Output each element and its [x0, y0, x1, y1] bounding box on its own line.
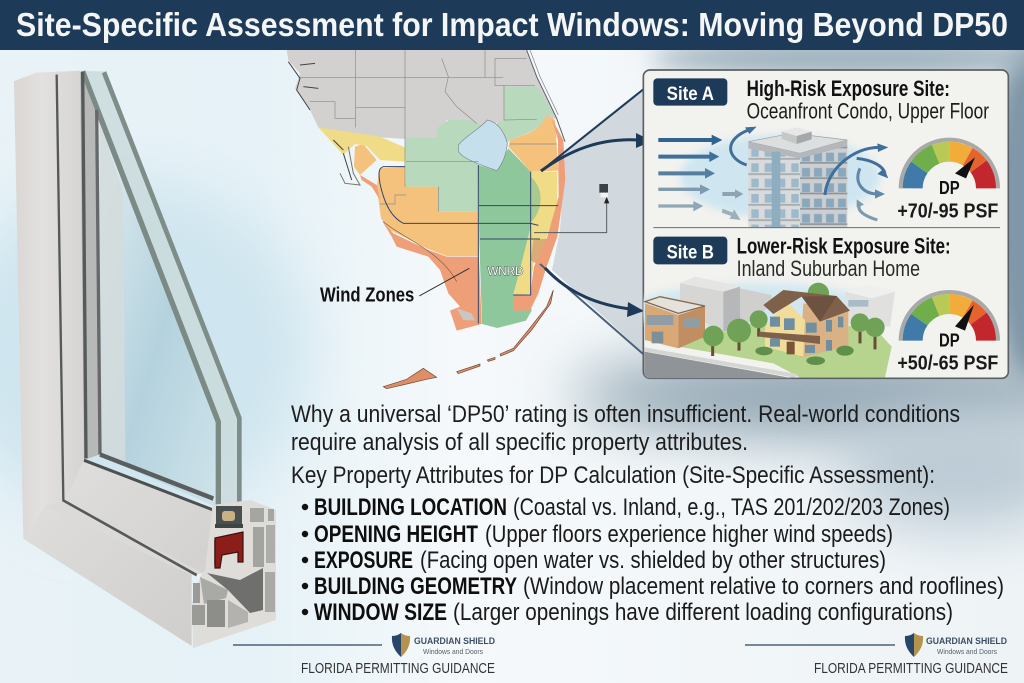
- footer logo left: Windows and Doors: [423, 647, 483, 656]
- site A scene: [658, 127, 888, 227]
- shield icon: [905, 633, 923, 657]
- footer logo right: [745, 633, 1008, 677]
- exposure: [302, 547, 886, 574]
- site B gauge: +50/-65 PSF: [897, 353, 998, 375]
- window frame cross-section: [14, 71, 276, 648]
- locator line and marker: [534, 184, 609, 233]
- house: [755, 290, 854, 365]
- site A gauge: +70/-95 PSF: [897, 200, 998, 222]
- yellow zones: [318, 127, 557, 295]
- exposure: (Facing open water vs. shielded by other structures): [420, 547, 886, 574]
- site B heading: [737, 233, 951, 281]
- gasket and pane base: [216, 506, 242, 526]
- footer logo left: GUARDIAN SHIELD: [414, 636, 495, 647]
- building geometry: BUILDING GEOMETRY: [314, 573, 517, 600]
- WNRD label: WNRD: [487, 264, 524, 278]
- site A heading: [747, 76, 989, 123]
- building location: BUILDING LOCATION: [314, 494, 507, 521]
- site A badge: Site A: [667, 84, 714, 105]
- building: [748, 127, 847, 227]
- site A heading: High-Risk Exposure Site:: [747, 76, 950, 101]
- dark green zone: [478, 148, 532, 328]
- grass and road: [660, 323, 892, 377]
- title bar: [0, 0, 1024, 50]
- footer logo left: [233, 633, 495, 677]
- site A gauge: DP: [939, 177, 960, 198]
- Florida wind zone map: [287, 50, 609, 389]
- profile end section: [192, 500, 276, 648]
- site comparison panel: [630, 70, 1008, 378]
- brick building: [645, 297, 705, 348]
- orange zones: [354, 115, 558, 256]
- opening height: OPENING HEIGHT: [314, 521, 478, 548]
- divider: [653, 226, 1000, 229]
- intro text: [291, 401, 960, 456]
- vertical frame: [14, 71, 84, 539]
- wind zones label: Wind Zones: [320, 284, 414, 307]
- window size: WINDOW SIZE: [314, 599, 447, 626]
- site B badge: [653, 237, 727, 264]
- opening height: [302, 521, 893, 548]
- site A badge: [653, 78, 727, 106]
- opening height: (Upper floors experience higher wind speeds): [485, 521, 893, 548]
- building location: [302, 494, 950, 521]
- trees: [703, 310, 885, 356]
- window size: [302, 599, 953, 626]
- thermal reinforcement: [215, 532, 243, 568]
- wind zones label: [320, 268, 469, 307]
- site B badge: Site B: [667, 242, 714, 263]
- county and zone lines: [300, 50, 557, 212]
- attribute list: [302, 494, 1004, 626]
- site A gauge: [897, 140, 998, 222]
- horizontal frame: [23, 460, 213, 646]
- building geometry: [302, 573, 1004, 600]
- shield icon: [392, 633, 410, 657]
- glass panes: [80, 71, 239, 516]
- gray counties: [287, 50, 557, 139]
- background buildings: [680, 277, 895, 333]
- exposure: EXPOSURE: [314, 547, 413, 574]
- salmon coastal zones: [360, 118, 565, 331]
- florida keys: [383, 290, 553, 389]
- light green zones: [405, 87, 554, 212]
- lake okeechobee: [458, 120, 507, 171]
- site B gauge: DP: [939, 329, 960, 350]
- site B heading: Lower-Risk Exposure Site:: [737, 233, 951, 258]
- site B gauge: [897, 292, 998, 375]
- site B scene: [630, 277, 895, 378]
- footer logo left: FLORIDA PERMITTING GUIDANCE: [301, 661, 495, 677]
- footer logo right: Windows and Doors: [937, 647, 997, 656]
- intro text: require analysis of all specific property attributes.: [291, 429, 748, 456]
- callout cone from map to panel: [552, 84, 648, 357]
- wind arrows: [658, 135, 743, 220]
- site B heading: Inland Suburban Home: [737, 256, 920, 281]
- west coast islands: [288, 62, 360, 185]
- window size: (Larger openings have different loading configurations): [453, 599, 953, 626]
- footer logo right: GUARDIAN SHIELD: [926, 636, 1007, 647]
- connector lines and arrows: [540, 84, 652, 360]
